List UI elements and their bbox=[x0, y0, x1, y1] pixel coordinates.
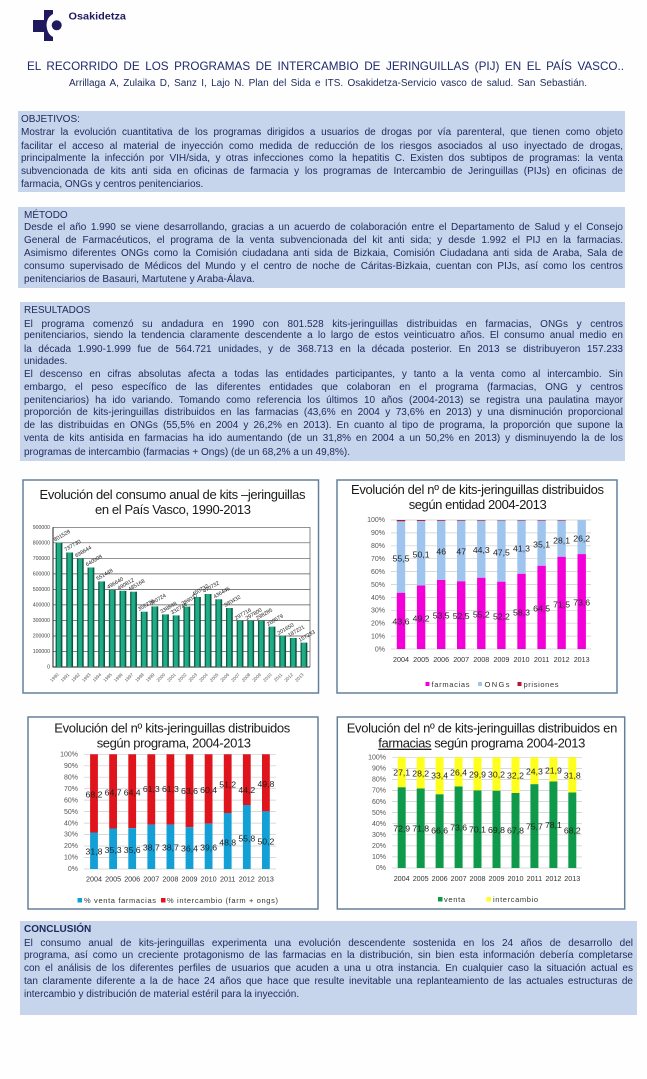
chart: kits en farmacias segun programa 2004-2013: 71,8 bbox=[412, 823, 429, 833]
chart: consumo anual de kits 1990-2013: 2006 bbox=[219, 672, 230, 683]
chart: kits segun programa 2004-2013: 0% bbox=[68, 866, 78, 873]
chart: consumo anual de kits 1990-2013: 700000 bbox=[33, 556, 50, 562]
chart: kits segun entidad 2004-2013: 2007 bbox=[453, 655, 469, 664]
chart: kits segun entidad 2004-2013: 64,5 bbox=[533, 603, 550, 613]
chart: kits en farmacias segun programa 2004-2013: 2009 bbox=[488, 874, 504, 883]
chart: kits segun programa 2004-2013: 61,3 bbox=[143, 784, 160, 794]
chart: consumo anual de kits 1990-2013: 298285 bbox=[255, 608, 274, 622]
chart: kits en farmacias segun programa 2004-2013: 67,8 bbox=[507, 826, 524, 836]
chart: kits segun entidad 2004-2013: 55,2 bbox=[473, 609, 490, 619]
chart: consumo anual de kits 1990-2013 bbox=[22, 479, 320, 694]
chart: kits segun entidad 2004-2013: 0% bbox=[375, 646, 385, 654]
chart: consumo anual de kits 1990-2013: 2000 bbox=[156, 672, 167, 683]
chart: consumo anual de kits 1990-2013: 640908 bbox=[85, 554, 104, 568]
panel: resultados: El programa comenzó su andadura en 1990 con 801.528 kits-jeringuillas distribuidas en farmacias, ONGs y centros bbox=[24, 318, 623, 330]
chart: consumo anual de kits 1990-2013: 1992 bbox=[70, 672, 81, 683]
chart: consumo anual de kits 1990-2013: 801528 bbox=[53, 529, 72, 543]
chart: kits segun entidad 2004-2013: 49,2 bbox=[413, 613, 430, 623]
chart: kits segun programa 2004-2013: 49,8 bbox=[257, 779, 275, 789]
panel: conclusion: CONCLUSIÓN bbox=[24, 924, 91, 935]
chart: kits segun programa 2004-2013: 50,2 bbox=[257, 837, 275, 847]
panel: resultados: penitenciarios, siendo la tendencia claramente descendente a lo largo de estos veinticuatro años. El consumo anual medio en bbox=[24, 330, 623, 341]
chart: consumo anual de kits 1990-2013: 0 bbox=[47, 665, 50, 671]
chart: consumo anual de kits 1990-2013: 356276 bbox=[137, 599, 156, 613]
chart: consumo anual de kits 1990-2013: 1997 bbox=[124, 672, 135, 683]
chart: kits en farmacias segun programa 2004-2013: 31,8 bbox=[564, 770, 581, 780]
chart: kits en farmacias segun programa 2004-2013: 2011 bbox=[527, 874, 542, 883]
chart: kits en farmacias segun programa 2004-2013: 2005 bbox=[413, 874, 429, 883]
chart: kits segun entidad 2004-2013: 41,3 bbox=[513, 544, 530, 554]
chart: kits segun entidad 2004-2013: 50,1 bbox=[413, 549, 430, 559]
chart: kits en farmacias segun programa 2004-2013: venta bbox=[444, 895, 466, 904]
chart: kits segun programa 2004-2013: 50% bbox=[64, 809, 78, 816]
chart: kits segun programa 2004-2013: 64,7 bbox=[105, 787, 122, 797]
chart: kits segun programa 2004-2013: 2008 bbox=[162, 874, 178, 884]
panel: resultados: penitenciarios) ha ido variando. Tomando como referencia los últimos 10 años (2004-2013) se registra una paulatina mayor bbox=[24, 394, 623, 406]
chart: kits segun entidad 2004-2013: 50% bbox=[371, 582, 385, 589]
panel: resultados: embargo, el peso específico de las diferentes entidades que colaboran en el programa (farmacias, ONG y centros bbox=[24, 382, 623, 392]
chart: kits segun entidad 2004-2013: 47,5 bbox=[493, 547, 510, 557]
chart: kits segun entidad 2004-2013 bbox=[336, 479, 618, 694]
chart: consumo anual de kits 1990-2013: 490812 bbox=[117, 578, 135, 592]
chart: kits segun programa 2004-2013: 63,6 bbox=[181, 786, 198, 796]
panel: metodo: Asimismo diferentes ONGs como la Comisión ciudadana anti sida de Bizkaia, Comisión Ciudadana anti sida de Araba, Sala de bbox=[24, 248, 623, 259]
panel: metodo: MÉTODO bbox=[24, 210, 68, 220]
chart: consumo anual de kits 1990-2013: 1999 bbox=[145, 672, 156, 683]
chart: consumo anual de kits 1990-2013: 2003 bbox=[188, 672, 199, 683]
chart: consumo anual de kits 1990-2013: 297716 bbox=[234, 608, 253, 622]
chart: kits segun programa 2004-2013: 68,2 bbox=[86, 789, 103, 799]
chart: kits segun entidad 2004-2013: 28,1 bbox=[553, 535, 570, 545]
chart: kits segun programa 2004-2013: 30% bbox=[64, 832, 78, 839]
chart: consumo anual de kits 1990-2013: 2001 bbox=[166, 672, 177, 683]
chart: consumo anual de kits 1990-2013: 2002 bbox=[177, 672, 188, 683]
chart: kits en farmacias segun programa 2004-2013: 28,2 bbox=[412, 768, 429, 778]
panel: metodo: Desde el año 1.990 se viene desarrollando, gracias a un acuerdo de colaboración entre el Departamento de Salud y el Consejo bbox=[24, 222, 623, 233]
chart: kits segun entidad 2004-2013: ONGs bbox=[484, 680, 510, 689]
chart: kits segun entidad 2004-2013: 73,6 bbox=[573, 597, 590, 607]
panel: resultados: El descenso en cifras absolutas afecta a todas las entidades participantes, y tanto a la venta como al intercambio. Sin bbox=[24, 369, 623, 380]
panel: objetivos: OBJETIVOS: bbox=[21, 114, 80, 124]
chart: consumo anual de kits 1990-2013: 1993 bbox=[81, 672, 92, 683]
chart: consumo anual de kits 1990-2013: 800000 bbox=[33, 540, 50, 546]
chart: kits en farmacias segun programa 2004-2013: 33,4 bbox=[431, 771, 448, 781]
chart: kits en farmacias segun programa 2004-2013: intercambio bbox=[493, 895, 538, 904]
chart: kits segun entidad 2004-2013: 71,5 bbox=[553, 599, 570, 609]
panel: objetivos: farmacia, ONGs y centros penitenciarios. bbox=[21, 178, 203, 190]
chart: kits segun entidad 2004-2013: 55,5 bbox=[393, 553, 410, 563]
chart: kits segun programa 2004-2013: 38,7 bbox=[162, 843, 179, 853]
chart: kits segun entidad 2004-2013: 2010 bbox=[514, 655, 530, 664]
chart: consumo anual de kits 1990-2013: Evolución del consumo anual de kits –jeringuillas bbox=[40, 487, 306, 502]
panel: objetivos: subvencionada de kits anti sida en oficinas de farmacia y los programas de Intercambio de Jeringuillas (PIJs) en oficinas de bbox=[21, 166, 623, 176]
chart: consumo anual de kits 1990-2013: 389037 bbox=[181, 593, 199, 607]
chart: kits en farmacias segun programa 2004-2013: farmacias según programa 2004-2013 bbox=[378, 736, 585, 751]
chart: kits en farmacias segun programa 2004-2013: 29,9 bbox=[469, 769, 486, 779]
chart: consumo anual de kits 1990-2013: 496640 bbox=[106, 577, 125, 591]
chart: kits en farmacias segun programa 2004-2013: 50% bbox=[372, 810, 386, 817]
chart: consumo anual de kits 1990-2013: 297800 bbox=[245, 608, 263, 622]
panel: metodo bbox=[18, 207, 625, 288]
panel: resultados: programas de intercambio (farmacias + Ongs) (de un 68,2% a un 49,8%). bbox=[24, 446, 350, 458]
chart: kits segun entidad 2004-2013: 26,2 bbox=[573, 533, 590, 543]
chart: kits segun programa 2004-2013: 64,4 bbox=[124, 787, 141, 797]
chart: kits segun programa 2004-2013: 51,2 bbox=[219, 780, 236, 790]
logo: Osakidetza: Osakidetza bbox=[68, 10, 126, 22]
chart: kits segun entidad 2004-2013: 90% bbox=[371, 530, 385, 537]
chart: kits segun entidad 2004-2013: 2008 bbox=[473, 655, 489, 664]
panel: metodo: penitenciarios de Basauri, Martutene y Araba-Álava. bbox=[24, 274, 255, 285]
panel: objetivos: facilitar el acceso al material de inyección como medida de reducción de los riesgos asociados al uso inyectado de drogas, bbox=[21, 140, 623, 152]
chart: kits segun programa 2004-2013: 2004 bbox=[86, 874, 102, 884]
chart: consumo anual de kits 1990-2013: 380432 bbox=[223, 595, 242, 609]
panel: resultados: venta de kits antisida en farmacias ha ido aumentando (de un 31,8% en 2004 a un 50,2% en 2013) y disminuyendo la de los bbox=[24, 433, 623, 444]
chart: consumo anual de kits 1990-2013: 2013 bbox=[294, 672, 305, 683]
chart: consumo anual de kits 1990-2013: 187221 bbox=[287, 625, 306, 639]
chart: kits en farmacias segun programa 2004-2013: 27,1 bbox=[393, 768, 410, 778]
chart: consumo anual de kits 1990-2013: 2010 bbox=[262, 672, 273, 683]
chart: kits segun programa 2004-2013: 55,8 bbox=[238, 833, 255, 843]
chart: kits segun programa 2004-2013: 10% bbox=[64, 855, 78, 862]
chart: kits segun programa 2004-2013: 2011 bbox=[220, 874, 235, 884]
chart: kits en farmacias segun programa 2004-2013: 66,6 bbox=[431, 826, 448, 836]
panel: conclusion: tan claramente diferente a la de hace 24 años que hace que resulte inevitable una replanteamiento de las actuales estructuras de bbox=[24, 976, 633, 986]
chart: consumo anual de kits 1990-2013: 338848 bbox=[160, 601, 178, 615]
chart: kits segun programa 2004-2013: 2013 bbox=[258, 874, 274, 884]
chart: consumo anual de kits 1990-2013: 900000 bbox=[33, 525, 50, 531]
chart: consumo anual de kits 1990-2013: 1998 bbox=[134, 672, 145, 683]
chart: kits en farmacias segun programa 2004-2013: 2013 bbox=[564, 874, 580, 883]
chart: kits en farmacias segun programa 2004-2013 bbox=[336, 716, 626, 910]
chart: consumo anual de kits 1990-2013: 436446 bbox=[213, 586, 231, 600]
chart: kits en farmacias segun programa 2004-2013: Evolución del nº de kits-jeringuillas distribuidos en bbox=[347, 721, 617, 736]
panel: conclusion: con el análisis de los diferentes perfiles de usuarios que acuden a una u otra instancia. En cualquier caso la situación actual es bbox=[24, 963, 633, 974]
panel: objetivos: principalmente la infección por VIH/sida, y otras infecciones como la hepatitis C. Existen dos subtipos de programas: la venta bbox=[21, 153, 623, 164]
chart: kits en farmacias segun programa 2004-2013: 26,4 bbox=[450, 768, 467, 778]
chart: kits segun programa 2004-2013: 100% bbox=[60, 752, 78, 758]
chart: kits segun programa 2004-2013: 60,4 bbox=[200, 785, 217, 795]
chart: consumo anual de kits 1990-2013: 2009 bbox=[251, 672, 262, 683]
chart: kits segun programa 2004-2013: 90% bbox=[64, 763, 78, 770]
chart: kits segun programa 2004-2013: 44,2 bbox=[238, 785, 255, 795]
chart: kits en farmacias segun programa 2004-2013: 72,9 bbox=[393, 823, 410, 833]
chart: kits en farmacias segun programa 2004-2013: 2010 bbox=[508, 874, 524, 883]
chart: consumo anual de kits 1990-2013: en el País Vasco, 1990-2013 bbox=[95, 502, 251, 517]
chart: kits segun programa 2004-2013: 70% bbox=[64, 786, 78, 793]
panel: metodo: General de Farmacéuticos, el programa de la venta subvencionada del kit anti sida; y desde 1.992 el PIJ en la farmacias. bbox=[24, 235, 623, 246]
chart: kits segun entidad 2004-2013: 2005 bbox=[413, 655, 429, 664]
chart: kits en farmacias segun programa 2004-2013: 30,2 bbox=[488, 769, 505, 779]
chart: kits segun entidad 2004-2013: Evolución del nº de kits-jeringuillas distribuidos bbox=[351, 482, 604, 497]
chart: consumo anual de kits 1990-2013: 260579 bbox=[266, 614, 285, 628]
chart: consumo anual de kits 1990-2013: 1996 bbox=[113, 672, 124, 683]
chart: kits segun entidad 2004-2013: 70% bbox=[371, 556, 385, 563]
chart: consumo anual de kits 1990-2013: 1990 bbox=[49, 672, 60, 683]
chart: kits segun entidad 2004-2013: 52,2 bbox=[493, 611, 510, 621]
chart: consumo anual de kits 1990-2013: 551448 bbox=[96, 568, 114, 582]
chart: kits en farmacias segun programa 2004-2013: 32,2 bbox=[507, 771, 524, 781]
title: EL RECORRIDO DE LOS PROGRAMAS DE INTERCAMBIO DE JERINGUILLAS (PIJ) EN EL PAÍS VASCO.. bbox=[27, 60, 624, 73]
chart: kits en farmacias segun programa 2004-2013: 100% bbox=[368, 754, 386, 762]
chart: kits segun entidad 2004-2013: farmacias bbox=[432, 680, 470, 689]
panel: objetivos: Mostrar la evolución cuantitativa de los programas dirigidos a usuarios de drogas por vía parenteral, que tienen como objeto bbox=[21, 127, 623, 138]
chart: kits segun programa 2004-2013: 40% bbox=[64, 820, 78, 827]
chart: consumo anual de kits 1990-2013: 2005 bbox=[209, 672, 220, 683]
chart: consumo anual de kits 1990-2013: 737730 bbox=[64, 539, 82, 553]
chart: kits segun entidad 2004-2013: 20% bbox=[371, 620, 385, 628]
chart: kits en farmacias segun programa 2004-2013: 2012 bbox=[545, 874, 561, 883]
chart: kits segun programa 2004-2013: 48,8 bbox=[219, 837, 236, 847]
chart: kits segun entidad 2004-2013: 60% bbox=[371, 569, 385, 576]
panel: resultados: de las distribuidas en ONGs (55,5% en 2004 y 26,2% en 2013). En cuanto al tipo de programa, la proporción que supone la bbox=[24, 420, 623, 431]
chart: kits segun entidad 2004-2013: 100% bbox=[367, 517, 385, 524]
chart: kits segun programa 2004-2013: 61,3 bbox=[162, 784, 179, 794]
chart: kits en farmacias segun programa 2004-2013: 90% bbox=[372, 766, 386, 772]
chart: kits segun programa 2004-2013: 80% bbox=[64, 774, 78, 782]
chart: consumo anual de kits 1990-2013: 1994 bbox=[92, 672, 103, 683]
chart: kits segun programa 2004-2013 bbox=[27, 716, 319, 910]
chart: kits segun programa 2004-2013: 2006 bbox=[124, 874, 140, 884]
chart: kits segun programa 2004-2013: % intercambio (farm + ongs) bbox=[167, 896, 278, 905]
panel: conclusion: El consumo anual de kits-jeringuillas experimenta una evolución descendente sostenida en los 24 años de desarrollo del bbox=[24, 938, 633, 948]
chart: kits segun programa 2004-2013: 35,6 bbox=[124, 845, 141, 855]
chart: kits segun programa 2004-2013: 2005 bbox=[105, 874, 121, 884]
chart: kits segun entidad 2004-2013: según entidad 2004-2013 bbox=[409, 497, 547, 512]
chart: kits segun programa 2004-2013: 2009 bbox=[182, 874, 198, 884]
chart: kits en farmacias segun programa 2004-2013: 21,9 bbox=[545, 766, 562, 776]
panel: resultados: la década 1.990-1.999 fue de 564.721 unidades, y de 368.713 en la década posterior. En 2013 se distribuyeron 157.233 bbox=[24, 344, 623, 355]
chart: consumo anual de kits 1990-2013: 332744 bbox=[170, 602, 189, 616]
chart: consumo anual de kits 1990-2013: 200000 bbox=[33, 634, 50, 640]
chart: kits en farmacias segun programa 2004-2013: 10% bbox=[372, 854, 386, 861]
chart: kits segun programa 2004-2013: según programa, 2004-2013 bbox=[97, 735, 251, 750]
chart: kits segun entidad 2004-2013: 53,5 bbox=[433, 611, 450, 621]
chart: consumo anual de kits 1990-2013: 500000 bbox=[33, 587, 50, 593]
chart: consumo anual de kits 1990-2013: 2012 bbox=[283, 672, 294, 683]
panel: metodo: consumo supervisado de Médicos del Mundo y el centro de noche de Cáritas-Bizkaia, cuentan con PIJs, así como los centros bbox=[24, 261, 623, 272]
panel: objetivos bbox=[18, 111, 625, 192]
chart: kits en farmacias segun programa 2004-2013: 78,1 bbox=[545, 820, 562, 830]
chart: kits segun entidad 2004-2013: 58,3 bbox=[513, 608, 530, 618]
chart: kits segun entidad 2004-2013: 2004 bbox=[393, 655, 409, 664]
chart: consumo anual de kits 1990-2013: 157233 bbox=[298, 630, 316, 644]
chart: consumo anual de kits 1990-2013: 600000 bbox=[33, 572, 50, 578]
chart: kits segun programa 2004-2013: Evolución del nº kits-jeringuillas distribuidos bbox=[54, 721, 291, 736]
chart: kits en farmacias segun programa 2004-2013: 73,6 bbox=[450, 823, 467, 833]
chart: kits segun programa 2004-2013: 38,7 bbox=[143, 843, 160, 853]
chart: kits segun entidad 2004-2013: 2006 bbox=[433, 655, 449, 664]
chart: consumo anual de kits 1990-2013: 450732 bbox=[191, 584, 210, 598]
chart: kits segun programa 2004-2013: 20% bbox=[64, 843, 78, 850]
authors: Arrillaga A, Zulaika D, Sanz I, Lajo N. Plan del Sida e ITS. Osakidetza-Servicio vasco de salud. San Sebastián. bbox=[69, 78, 587, 89]
chart: kits segun entidad 2004-2013: 44,3 bbox=[473, 545, 490, 555]
chart: kits en farmacias segun programa 2004-2013: 70% bbox=[372, 788, 386, 795]
chart: kits en farmacias segun programa 2004-2013: 2006 bbox=[432, 874, 448, 883]
chart: kits segun entidad 2004-2013: 40% bbox=[371, 595, 385, 602]
chart: consumo anual de kits 1990-2013: 1995 bbox=[102, 672, 113, 683]
chart: consumo anual de kits 1990-2013: 698644 bbox=[74, 545, 93, 559]
panel: conclusion bbox=[20, 921, 637, 1015]
chart: consumo anual de kits 1990-2013: 400000 bbox=[33, 603, 50, 609]
chart: consumo anual de kits 1990-2013: 2004 bbox=[198, 672, 209, 683]
chart: kits segun entidad 2004-2013: 43,6 bbox=[393, 617, 410, 627]
panel: conclusion: programa, así como un creciente protagonismo de las farmacias en la distribución, sin bien esta información debería completarse bbox=[24, 950, 633, 961]
chart: kits segun programa 2004-2013: 31,8 bbox=[86, 847, 103, 857]
chart: kits en farmacias segun programa 2004-2013: 2004 bbox=[394, 874, 410, 883]
chart: kits segun entidad 2004-2013: 46 bbox=[436, 547, 446, 557]
chart: kits segun programa 2004-2013: 36,4 bbox=[181, 843, 198, 853]
panel: resultados bbox=[20, 302, 625, 461]
chart: kits en farmacias segun programa 2004-2013: 24,3 bbox=[526, 766, 543, 776]
chart: kits segun programa 2004-2013: % venta farmacias bbox=[84, 896, 156, 905]
chart: kits en farmacias segun programa 2004-2013: 70,1 bbox=[469, 824, 486, 834]
chart: kits segun entidad 2004-2013: 2013 bbox=[574, 655, 590, 664]
chart: kits en farmacias segun programa 2004-2013: 68,2 bbox=[564, 826, 581, 836]
panel: resultados: proporción de kits-jeringuillas distribuidos en las farmacias (43,6% en 2004 y 73,6% en 2013) y una disminución proporcional bbox=[24, 407, 623, 418]
chart: consumo anual de kits 1990-2013: 201650 bbox=[277, 623, 295, 637]
chart: kits en farmacias segun programa 2004-2013: 75,7 bbox=[526, 822, 543, 832]
chart: kits en farmacias segun programa 2004-2013: 2008 bbox=[470, 874, 486, 883]
chart: kits segun entidad 2004-2013: prisiones bbox=[524, 680, 559, 689]
chart: kits segun entidad 2004-2013: 52,5 bbox=[453, 611, 470, 621]
chart: kits segun programa 2004-2013: 35,3 bbox=[105, 845, 122, 855]
chart: consumo anual de kits 1990-2013: 100000 bbox=[33, 649, 50, 655]
chart: kits segun programa 2004-2013: 39,6 bbox=[200, 842, 217, 852]
chart: kits en farmacias segun programa 2004-2013: 60% bbox=[372, 799, 386, 806]
chart: consumo anual de kits 1990-2013: 2008 bbox=[241, 672, 252, 683]
chart: kits segun entidad 2004-2013: 80% bbox=[371, 543, 385, 550]
panel: resultados: unidades. bbox=[24, 356, 67, 367]
chart: kits segun entidad 2004-2013: 47 bbox=[456, 547, 466, 557]
chart: kits segun entidad 2004-2013: 2009 bbox=[493, 655, 509, 664]
chart: kits segun entidad 2004-2013: 10% bbox=[371, 634, 385, 640]
chart: kits en farmacias segun programa 2004-2013: 30% bbox=[372, 832, 386, 839]
chart: kits segun entidad 2004-2013: 2011 bbox=[534, 655, 549, 664]
chart: consumo anual de kits 1990-2013: 300000 bbox=[33, 618, 50, 624]
chart: consumo anual de kits 1990-2013: 2011 bbox=[273, 672, 284, 683]
chart: kits en farmacias segun programa 2004-2013: 0% bbox=[376, 865, 386, 872]
chart: kits en farmacias segun programa 2004-2013: 40% bbox=[372, 821, 386, 828]
panel: conclusion: intercambio y distribución de material estéril para la inyección. bbox=[24, 989, 299, 1000]
chart: kits segun programa 2004-2013: 2012 bbox=[239, 874, 255, 884]
panel: resultados: RESULTADOS bbox=[24, 304, 90, 316]
chart: kits segun entidad 2004-2013: 30% bbox=[371, 608, 385, 614]
chart: kits en farmacias segun programa 2004-2013: 69,8 bbox=[488, 825, 505, 835]
chart: kits segun entidad 2004-2013: 35,1 bbox=[533, 539, 550, 549]
chart: kits segun programa 2004-2013: 2007 bbox=[143, 874, 159, 884]
chart: kits en farmacias segun programa 2004-2013: 80% bbox=[372, 776, 386, 784]
chart: kits en farmacias segun programa 2004-2013: 2007 bbox=[451, 874, 467, 883]
chart: kits segun programa 2004-2013: 2010 bbox=[201, 874, 217, 884]
chart: kits en farmacias segun programa 2004-2013: 20% bbox=[372, 843, 386, 850]
chart: consumo anual de kits 1990-2013: 390724 bbox=[149, 593, 167, 607]
chart: consumo anual de kits 1990-2013: 485168 bbox=[128, 579, 146, 593]
chart: kits segun entidad 2004-2013: 2012 bbox=[554, 655, 570, 664]
chart: consumo anual de kits 1990-2013: 470732 bbox=[202, 581, 221, 595]
chart: kits segun programa 2004-2013: 60% bbox=[64, 797, 78, 804]
chart: consumo anual de kits 1990-2013: 1991 bbox=[60, 672, 71, 683]
chart: consumo anual de kits 1990-2013: 2007 bbox=[230, 672, 241, 683]
logo: Osakidetza bbox=[33, 10, 126, 41]
